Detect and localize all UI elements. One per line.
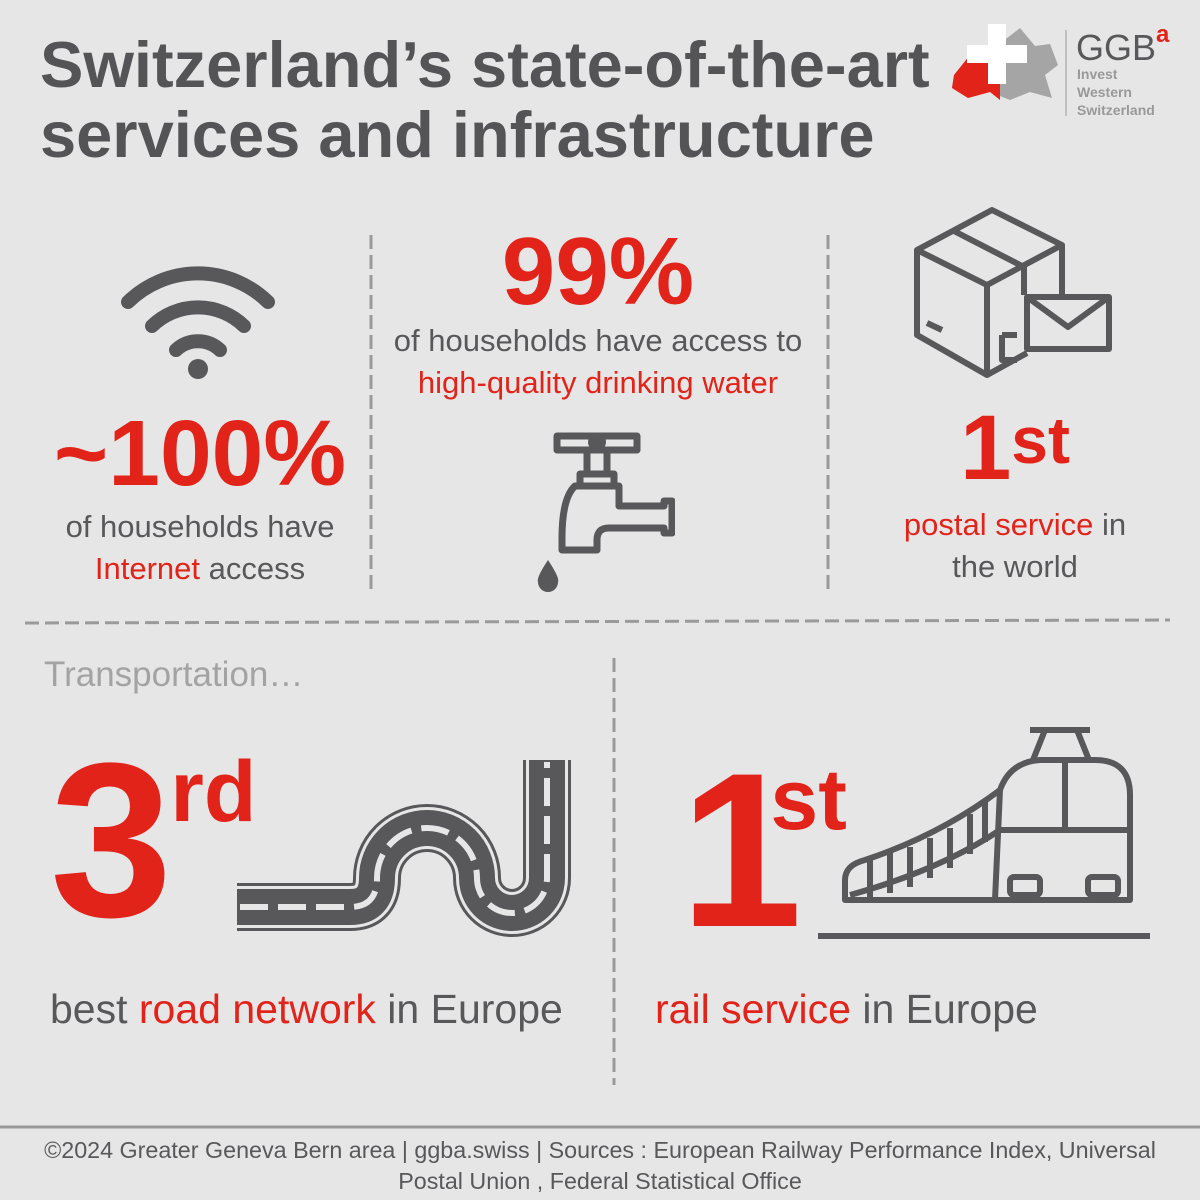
stat: water: 99% bbox=[502, 218, 694, 325]
footer bbox=[44, 1137, 1156, 1194]
logo: GGB bbox=[1076, 27, 1156, 68]
logo: Western bbox=[1077, 84, 1132, 100]
stat: postal: postal service in bbox=[904, 507, 1126, 542]
logo bbox=[952, 21, 1170, 118]
subheading: Transportation… bbox=[44, 655, 303, 694]
footer: Postal Union , Federal Statistical Office bbox=[398, 1168, 802, 1194]
logo: a bbox=[1156, 21, 1170, 48]
stat: rail: 1st bbox=[680, 727, 847, 973]
title: services and infrastructure bbox=[40, 98, 875, 171]
stat: internet: of households have bbox=[66, 509, 334, 544]
stat: postal: the world bbox=[952, 549, 1078, 584]
title bbox=[40, 28, 930, 171]
footer: ©2024 Greater Geneva Bern area | ggba.swiss | Sources : European Railway Performance Index, Universal bbox=[44, 1137, 1156, 1163]
stat: road: 3rd bbox=[50, 717, 256, 963]
icon: tap bbox=[538, 432, 675, 592]
stat: water bbox=[394, 218, 802, 400]
title: Switzerland’s state-of-the-art bbox=[40, 28, 930, 101]
icon: package and letter bbox=[914, 207, 1112, 378]
stat: internet: ~100% bbox=[54, 401, 346, 505]
stat: postal bbox=[904, 397, 1126, 584]
logo: Invest bbox=[1077, 66, 1118, 82]
stat: water: of households have access to bbox=[394, 323, 802, 358]
icon: road bbox=[237, 760, 571, 937]
logo: Switzerland bbox=[1077, 102, 1155, 118]
stat: internet: Internet access bbox=[95, 551, 305, 586]
caption: rail: rail service in Europe bbox=[655, 986, 1038, 1032]
caption: road: best road network in Europe bbox=[50, 986, 563, 1032]
stat: internet bbox=[54, 401, 346, 586]
stat: postal: 1st bbox=[960, 397, 1070, 499]
stat: water: high-quality drinking water bbox=[418, 365, 778, 400]
icon: train bbox=[818, 727, 1150, 939]
icon: wifi bbox=[121, 266, 275, 379]
